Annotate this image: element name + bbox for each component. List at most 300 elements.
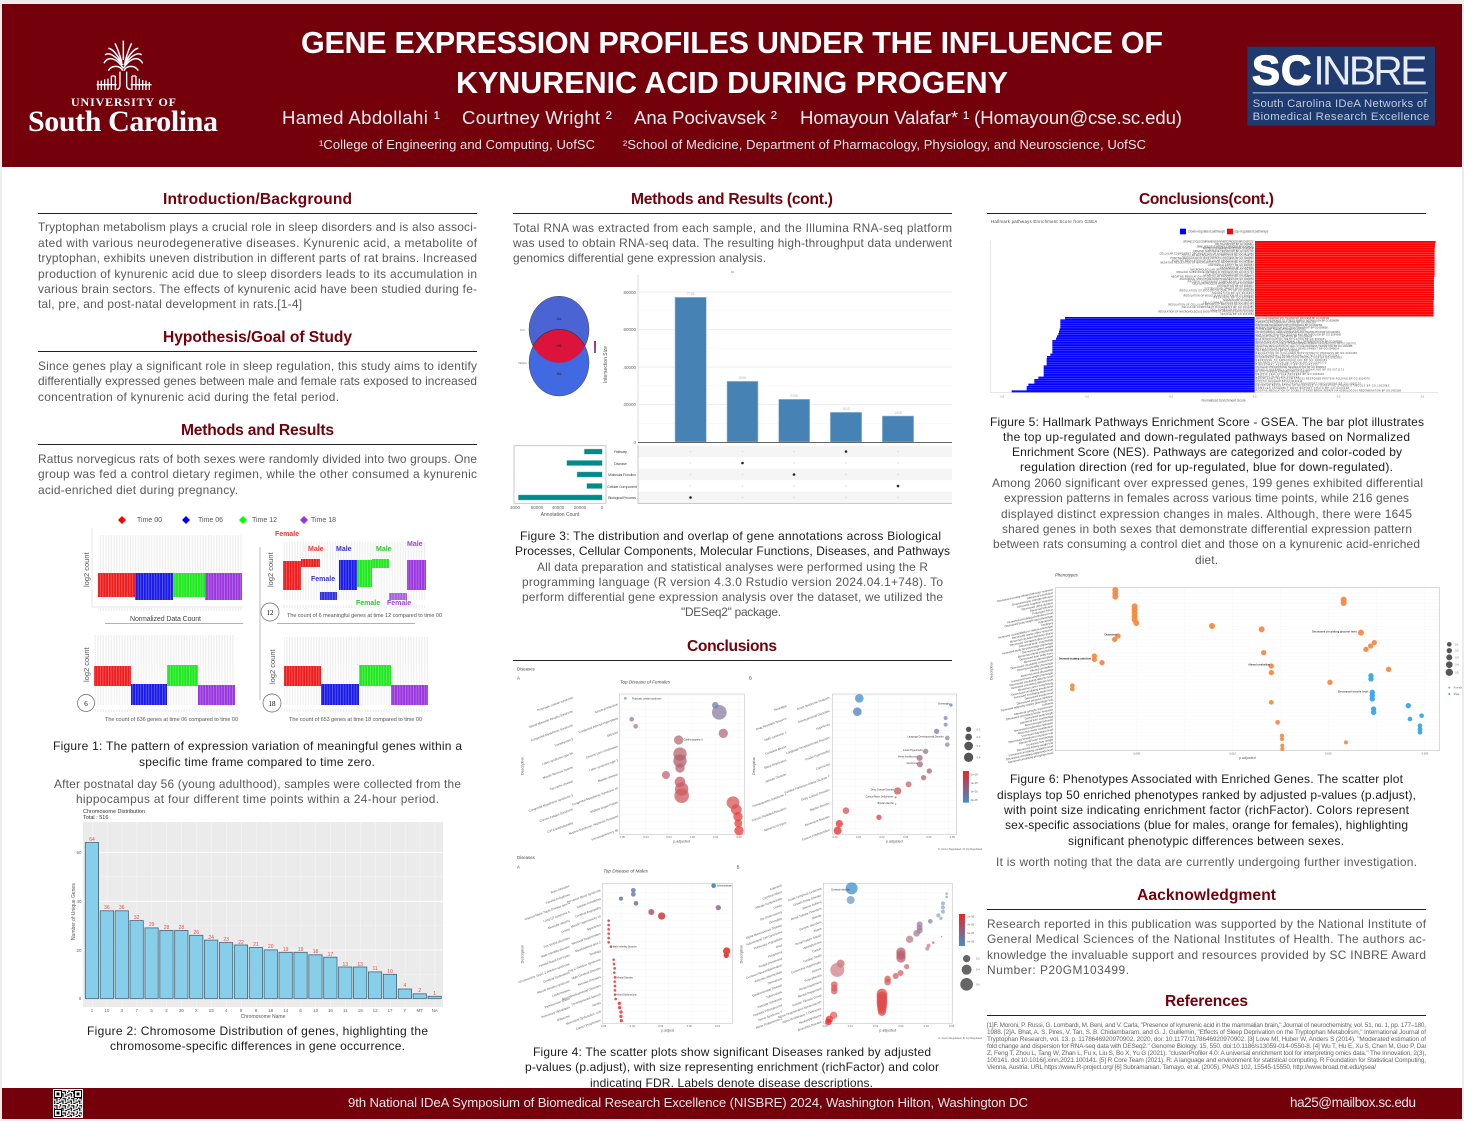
legend: phenotypes: 0.1 <box>1455 642 1459 646</box>
pathway labels: up: CELLULAR PROCESS MODIFICATION BP GO:0009987 <box>1192 283 1254 286</box>
disease labels B: Chronic Radiated Disorders <box>751 806 787 822</box>
pathway labels: up: REGULATION OF MACROMOLECULE BIOSYNTHETIC PROCESS BP GO:0010556 <box>1158 311 1254 314</box>
caption: figure 4: Figure 4: The scatter plots show significant Diseases ranked by adjusted <box>533 1045 931 1059</box>
disease labels male A: Fay C-Deletion Syndrome <box>568 957 602 973</box>
plot: time 12 comparison: Female <box>311 576 335 583</box>
pathway labels: down: MEIOTIC CELL CYCLE PROCESS BP GO:1903046 <box>1256 374 1325 376</box>
plot: time 06 comparison: log2 count <box>82 646 91 682</box>
bar value labels: 2 <box>418 988 421 994</box>
legend: time points: Time 06 <box>198 517 223 524</box>
disease labels male A: Long QT syndrome 6 <box>543 910 571 923</box>
pathway labels: up: CELLULAR COMPONENT BIOGENESIS BP GO:0044085 <box>1182 306 1254 309</box>
disease labels male A: Glaucoma <box>556 1014 571 1022</box>
venn diagram <box>518 296 609 396</box>
scatter: 0.010 <box>1229 752 1236 756</box>
pathway labels: up: SYSTEM DEVELOPMENT BP GO:0048731 <box>1204 288 1254 290</box>
text: introduction body <box>38 220 478 311</box>
scatter male B: 0.05 <box>949 1024 955 1028</box>
disease labels A: Chronic Liver Cholestasis <box>585 744 619 760</box>
legend: male size and colour: 0.2 <box>976 957 980 961</box>
phenotype labels: Abnormal cognition response <box>1017 597 1054 609</box>
pathway labels: down: INTERFERON GAMMA PROTEIN PRODUCTION BP GO:0032609 <box>1256 357 1342 360</box>
disease labels B: Complete Blocks <box>765 744 787 756</box>
authors: Homayoun Valafar* ¹ (Homayoun@cse.sc.edu) <box>800 107 1182 128</box>
scatter B: Overweight <box>938 703 950 706</box>
text: introduction body: various brain sectors. The effects of kynurenic acid have been studied during fe- <box>38 282 477 296</box>
scatter male B: 0.04 <box>924 1024 929 1028</box>
caption: figure 4: indicating FDR. Labels denote disease descriptions. <box>590 1076 873 1090</box>
chart: figure 1 expression patterns <box>78 516 442 723</box>
venn diagram: GO <box>520 328 525 332</box>
chart: figure 4 males diseases <box>517 855 983 1040</box>
pathway labels: down: MITOCHONDRIAL TRANSLATIONAL ACTIVITY BP GO:0032543 <box>1256 354 1340 357</box>
venn diagram: AB <box>557 344 562 348</box>
venn diagram: A& <box>557 317 562 321</box>
text: acknowledgment body: knowledge the invaluable support and resources provided by SC INBRE Award <box>987 948 1426 962</box>
disease labels male A: Unrest <box>561 927 570 934</box>
disease labels A: Muscle Nervous System <box>542 765 574 780</box>
legend: time points: Time 00 <box>137 517 162 524</box>
disease labels male A: Chromosome 15q11.2 deletion syndrome <box>518 962 571 984</box>
axes: 0 <box>79 996 82 1001</box>
disease labels male B: Cardiovascular Disease <box>752 983 783 998</box>
disease labels male A: Brain Infarction <box>550 884 571 894</box>
scatter: Decreased circulating glycerol level <box>1312 631 1357 634</box>
bar value labels: 28 <box>164 925 169 931</box>
disease labels male B: Dermatosis <box>767 976 783 985</box>
phenotype labels: Decreased circulating albumin level <box>1009 674 1054 687</box>
phenotype labels: Decreased lean body mass <box>1019 651 1054 662</box>
legend: size and colour: 0.3 <box>977 744 981 748</box>
authors: Ana Pocivavsek ² <box>634 107 777 128</box>
scatter B: 0.05 <box>950 835 955 839</box>
axes: 5 <box>150 1008 153 1013</box>
phenotype labels: Increased circulating leptin level <box>1013 687 1054 700</box>
disease labels male A <box>518 884 602 1031</box>
disease labels male A: Familial Basal Cell Cysts <box>538 953 571 968</box>
disease labels B: Sleep Deprivation <box>763 758 787 770</box>
phenotype labels: Abnormal synaptic transmission <box>1014 704 1054 716</box>
bar chart: annotation count: Biological Process <box>608 495 636 500</box>
axes: 2 <box>165 1008 168 1013</box>
heading: introduction: Introduction/Background <box>163 191 352 208</box>
disease labels male B: Tuberculosis <box>765 990 783 999</box>
scatter: Altered cerebellum <box>1248 664 1270 667</box>
phenotype labels: Abnormal brain morphology <box>1019 637 1054 649</box>
disease labels male B: Genetic Fibrosis Group <box>792 993 822 1007</box>
disease labels male B: Acute Lymphoid Leukemia <box>788 886 822 902</box>
text: references list: Vienna, Austria. URL https://www.R-project.org/ [6] Subramanian, Tamayo, et al. (2005), PNAS 102, 15545-15550, http://www.broad.mit.edu/gsea/ <box>987 1064 1376 1071</box>
text: references list: Tryptophan Research, vol. 13, p. 1178646920970902, 2020, doi: 10.1177/1178646920970902. [3] Love MI, Huber W, Anders S (2014). "Moderated estimation of <box>987 1036 1426 1043</box>
pathway labels: down: DNA REPLICATION INITIATION BP GO:0006270 <box>1256 361 1327 364</box>
caption: figure 6: significant phenotypic differences between sexes. <box>1068 834 1344 848</box>
text: gene counts: displayed distinct expression changes in males. Although, there were 1645 <box>1001 507 1412 521</box>
axis: 0.5 <box>1337 395 1341 399</box>
disease labels male B: Fungal pneumonia <box>758 956 783 969</box>
disease labels male A: Pulmonary Hypoplasia <box>541 1005 571 1019</box>
disease labels male B: Cancer <box>812 947 822 954</box>
disease labels male A: Neurodevelopmental Disorders <box>561 983 602 1001</box>
pathway labels: down: CHROMATIN BP GO:0006325 <box>1256 375 1300 378</box>
chart: figure 4 females diseases: Description <box>520 757 524 775</box>
legend: male size and colour: 2e-05 <box>967 915 975 919</box>
scatter male B: 0.02 <box>873 1024 879 1028</box>
scatter B: Cortical Motor Deficiencies <box>866 795 894 798</box>
pathway labels: up: NEGATIVE REGULATION OF CELLULAR PROCESS BP GO:0048523 <box>1171 276 1254 279</box>
axes: 20 <box>179 1008 184 1013</box>
bar value labels: 36 <box>119 905 125 911</box>
scatter B: Deep Cortical Disorder <box>871 789 895 792</box>
bar chart: annotation count: 0 <box>601 505 604 510</box>
bar value labels: 4 <box>404 983 407 989</box>
pathway labels: down: CELLULAR RESPIRATION, TRANSPORT PROCESS BP GO:0045333 <box>1256 317 1330 320</box>
scatter A: 0.04 <box>643 835 649 839</box>
pathway labels: up: RESPONSE BP GO:0050896 <box>1214 298 1254 300</box>
axis: -0.5 <box>1168 395 1173 399</box>
axes: Y <box>403 1008 406 1013</box>
phenotype labels: Abnormal motor coordination <box>1017 724 1054 736</box>
bar value labels: 29 <box>149 922 155 928</box>
disease labels B: Seizure Disorder <box>765 772 787 784</box>
phenotype labels: Increased dopamine level <box>1021 727 1054 738</box>
disease labels B <box>751 695 831 842</box>
disease labels male B: Genetic disorders <box>799 920 822 932</box>
legend: male size and colour <box>938 914 983 1040</box>
disease labels male A: Myoclonus <box>587 923 602 931</box>
phenotype labels: Decreased insulin level <box>1024 691 1054 701</box>
chart: figure 4 females diseases: B <box>749 676 752 681</box>
plot: time 12 comparison: 12 <box>266 609 274 617</box>
pathway labels: down <box>1256 317 1402 392</box>
legend: size and colour: 2e-05 <box>971 772 978 776</box>
axes: 60 <box>76 850 82 855</box>
text: RNA-seq methods: genomics differential gene expression analysis. <box>513 251 766 265</box>
text: acknowledgment body: Number: P20GM103499. <box>987 963 1129 977</box>
chart: figure 5 GSEA enrichment: Normalized Enrichment Score <box>1202 399 1246 403</box>
disease labels A: Polycystic ovarian syndrome <box>537 695 574 712</box>
phenotype labels: Decreased kidney weight trait <box>1016 741 1054 752</box>
scatter male B: 0.00 <box>822 1024 828 1028</box>
chart: figure 3 annotation upset plot <box>510 272 952 518</box>
axes: 9 <box>240 1008 243 1013</box>
pathway labels: up: LOCALIZATION PROCESS BP GO:0051179 <box>1204 273 1254 276</box>
axis: 0.0 <box>1253 395 1257 399</box>
scatter male B: 0.01 <box>848 1024 853 1028</box>
authors <box>282 107 1182 128</box>
disease labels male B: Polycythemia <box>804 973 822 983</box>
caption: figure 4: p-values (p.adjust), with size representing enrichment (richFactor) and color <box>525 1060 939 1074</box>
phenotype labels: Asthenia <box>1042 701 1054 707</box>
plot: time 06 comparison <box>78 635 238 723</box>
disease labels male A: Muscle Atrophy syndrome <box>537 979 571 995</box>
phenotype labels: Decreased circulating insulin level <box>1011 684 1054 697</box>
plot: time 06 comparison: 6 <box>84 700 88 708</box>
disease labels A: Transthyretin 3 <box>554 737 574 748</box>
bar value labels <box>89 837 436 997</box>
disease labels male B: Renal Impairment <box>798 980 822 992</box>
venn diagram: B& <box>557 372 562 376</box>
disease labels A: Chronic Fatigue Syndrome <box>539 807 574 823</box>
legend: size and colour: 6e-05 <box>971 790 978 794</box>
logo: SC INBRE: South Carolina IDeA Networks of <box>1253 98 1427 110</box>
axes: 8 <box>255 1008 258 1013</box>
pathway labels: up: POSITIVE REGULATION OF BIOSYNTHETIC PROCESS BP GO:0009891 <box>1170 257 1254 260</box>
disease labels male B: Nerve Degeneration Syndrome AD <box>777 1000 823 1019</box>
legend: male size and colour: 6e-05 <box>967 931 975 935</box>
logo: University of South Carolina <box>28 41 218 138</box>
text: statistical analysis <box>522 560 943 619</box>
pathway labels: up: SECRETION BP GO:0046903 <box>1212 293 1254 295</box>
axes: 16 <box>328 1008 333 1013</box>
panel: introduction <box>38 191 478 311</box>
scatter male A: Mental Disorder <box>617 976 633 979</box>
legend: phenotypes: 0.5 <box>1455 670 1459 674</box>
pathway labels: down: RIBOSOMAL ASSEMBLY BP GO:0042255 <box>1256 364 1318 367</box>
text: sample collection: hippocampus at four different time points within a 24-hour period. <box>76 792 439 806</box>
legend: male size and colour: 0.4 <box>976 968 980 972</box>
disease labels male B: Autoimmune Cell Carcinoma <box>746 930 783 947</box>
authors: Courtney Wright ² <box>462 107 612 128</box>
legend: phenotypes <box>1446 642 1463 696</box>
disease labels male B: Connective Hypertrophy <box>791 960 822 975</box>
scatter: 0.020 <box>1422 752 1429 756</box>
pathway labels: down: MITOCHONDRIAL GENE EXPRESSION AND TRANSLATION BP GO:0140053 <box>1256 331 1340 334</box>
QR code <box>53 1089 83 1118</box>
pathway labels: up: ORGANIC SUBSTANCE TRANSPORT BP GO:0071702 <box>1193 250 1254 253</box>
pathway labels: up: ORGANIC CYCLIC COMPOUND BIOSYNTHETIC PROCESS BP GO:0071702 <box>1183 241 1254 244</box>
text: gene counts: Among 2060 significant over expressed genes, 199 genes exhibited differential <box>992 476 1423 490</box>
pathway labels: down: POSITIVE REGULATION OF DOUBLE STRAND BREAK REPAIR VIA HOMOLOGOUS RECOMBINATION BP GO:1905168 <box>1256 389 1402 392</box>
text: RNA-seq methods: was used to obtain RNA-seq data. The resulting high-throughput data underwent <box>512 236 953 250</box>
pathway labels: down: NUCLEAR CHROMOSOME SEGREGATION BP GO:0098813 <box>1256 366 1326 369</box>
pathway labels: up: ORGANIC SUBSTANCE METABOLIC PROCESS BP GO:0071704 <box>1176 271 1254 274</box>
bar value labels: 17 <box>328 952 333 958</box>
chart: figure 4 males diseases: A <box>517 864 520 869</box>
phenotype labels: Increased body fat percentage phenotype <box>1002 641 1054 655</box>
disease labels male B: Renal Tubular Disorders <box>790 906 822 921</box>
bar chart: annotation count: 3000 <box>510 505 521 510</box>
axes: 14 <box>283 1008 289 1013</box>
chart: figure 4 females diseases: p.adjusted <box>886 840 903 844</box>
disease labels B: Developmental Disorders <box>797 709 831 724</box>
plot: time 06 comparison: The count of 636 genes at time 06 compared to time 00 <box>105 717 238 723</box>
text: RNA-seq methods: Total RNA was extracted from each sample, and the Illumina RNA-seq platform <box>513 221 952 235</box>
phenotype labels: Increased circulating bilirubin level <box>1011 677 1054 690</box>
disease labels A: Tay-sachs disease <box>549 779 574 791</box>
text: hypothesis body: concentration of kynurenic acid during the fetal period. <box>38 390 339 404</box>
bar value labels: 26 <box>194 930 199 936</box>
scatter male A: Male Infertility Disorder <box>613 946 637 949</box>
footer banner <box>2 1088 1462 1119</box>
scatter A: 0.01 <box>713 835 719 839</box>
chart: figure 6 phenotypes: p.adjusted <box>1239 756 1256 760</box>
scatter male A: 0.02 <box>687 1024 692 1028</box>
pathway labels: up: MACROMOLECULAR ORGANIZATION BP GO:0043933 <box>1190 269 1254 272</box>
title: KYNURENIC ACID DURING PROGENY <box>456 66 1008 100</box>
chart: figure 6 phenotypes <box>989 573 1463 764</box>
scatter B: Insulin Hypertrophy <box>903 749 924 752</box>
disease labels A: Nephro-Syndrome, Nephrotic Resistant <box>568 814 619 836</box>
panel: methods and results <box>38 422 477 1053</box>
disease labels B: Hypertonia <box>815 722 831 731</box>
disease labels A: Leber syndrome type 3A <box>542 751 574 766</box>
bar value labels: 23 <box>223 937 229 943</box>
text: further investigation: It is worth noting that the data are currently undergoing further investigation. <box>996 855 1417 869</box>
text: sample collection: After postnatal day 56 (young adulthood), samples were collected from the <box>54 777 461 791</box>
text: introduction body: Tryptophan metabolism plays a crucial role in sleep disorders and is also associ- <box>38 220 477 234</box>
disease labels B: Carcinoma <box>815 762 831 771</box>
scatter male B: Cerebral infarction <box>831 889 851 892</box>
disease labels A: Bladder disease <box>597 772 619 783</box>
legend: size and colour: 0.1 <box>977 727 981 731</box>
authors: Hamed Abdollahi ¹ <box>282 107 440 128</box>
bar chart: annotation count: Cellular Component <box>607 484 638 489</box>
text: references list: [1]F. Moroni, P. Russi, G. Lombardi, M. Beni, and V. Carla, "Presence of kynurenic acid in the mammalian brain," Journal of neurochemistry, vol. 51, no. 1, pp. 177–180, <box>987 1022 1426 1029</box>
text: introduction body: tal, pre, and post-natal development in rats.[1-4] <box>38 297 302 311</box>
disease labels B: Cancer Predisposition <box>801 828 831 842</box>
disease labels male A: Hernia <box>592 1001 602 1008</box>
scatter: Cholestasis <box>1104 634 1117 637</box>
logo: SC INBRE: SC <box>1252 46 1311 93</box>
caption: figure 5: Figure 5: Hallmark Pathways Enrichment Score - GSEA. The bar plot illustrates <box>990 415 1424 429</box>
axes: 10 <box>104 1008 110 1013</box>
bar value labels: 11 <box>372 966 378 972</box>
phenotype labels: Decreased circulating ferritin response <box>1005 707 1054 721</box>
pathway labels: up: LOCOMOTION BP GO:0040011 <box>1217 286 1254 288</box>
phenotype labels <box>997 587 1054 764</box>
disease labels male B: Bronchitis Disease <box>797 1020 822 1032</box>
phenotype labels: Increased adiposity related phenotype trait <box>1001 697 1054 712</box>
plot: time 12 comparison: log2 count <box>266 551 275 587</box>
disease labels B: Bipolar disorder <box>809 801 830 812</box>
scatter male A: 0.03 <box>658 1024 664 1028</box>
phenotype labels: Increased liver weight <box>1026 737 1054 747</box>
axes: 4 <box>225 1008 228 1013</box>
phenotype labels: Decreased spleen weight <box>1022 644 1054 655</box>
disease labels A: CIP Encephalopathy <box>547 821 574 834</box>
pathway labels: down: CELLULAR RESPONSE TO STRESS ENERGY METABOLISM BP GO:0034599 <box>1256 319 1340 322</box>
scatter male A: 0.04 <box>630 1024 635 1028</box>
title <box>301 26 1163 100</box>
scatter: Decreased circulating cortisol level <box>1059 657 1091 660</box>
legend <box>1180 229 1269 234</box>
disease labels male B: Ataxia <box>813 926 822 933</box>
disease labels male B <box>745 883 823 1032</box>
disease labels male A: Cerebral Angiopathy <box>575 905 602 919</box>
phenotype labels: Abnormal cortex morphology <box>1017 681 1054 692</box>
chart: figure 4 males diseases: Top Disease of Males <box>603 869 649 874</box>
disease labels male A: Muscular atrophy <box>547 918 571 930</box>
chart: figure 2 chromosome distribution: Total : 516 <box>83 815 108 821</box>
legend: Down-regulated pathways <box>1188 230 1225 234</box>
bar chart: intersection size: 1610 <box>842 407 850 411</box>
disease labels male B: Arthrosis Intermediate <box>754 970 783 984</box>
axes: MT <box>417 1008 423 1013</box>
scatter A: 0.03 <box>666 835 672 839</box>
pathway labels: up: PROTEOLYSIS IMMUNE PROCESS BP GO:0006508 <box>1203 249 1254 251</box>
text: sample collection <box>54 777 461 806</box>
legend: size and colour: C: Down Regulated, D: Up Regulated <box>938 847 983 851</box>
scatter A: Cardiomyopathy 3 <box>684 739 703 742</box>
phenotype labels: Decreased body length <box>1024 711 1054 721</box>
bar chart: annotation count: 60000 <box>531 505 544 510</box>
chart: figure 4 males diseases: p.adjust <box>661 1029 674 1033</box>
phenotype labels: Prolonged estrus <box>1032 607 1054 616</box>
phenotype labels: Abnormal adrenal gland <box>1023 654 1054 664</box>
legend: size and colour: 0.4 <box>977 755 981 759</box>
scatter B: 0.02 <box>879 835 885 839</box>
scatter male A: Motor Dysfunctions <box>617 994 637 997</box>
phenotype labels: Decreased circulating cortisol level <box>1010 657 1054 670</box>
disease labels A: Multiple Organ Failure <box>590 800 619 814</box>
plot: normalized data count: log2 count <box>82 551 91 587</box>
caption: figure 4 <box>526 1048 939 1088</box>
bars: up-regulated <box>1255 241 1436 317</box>
axis: -1.5 <box>999 395 1004 399</box>
chart: figure 4 males diseases: Diseases <box>517 855 535 860</box>
text: introduction body: ated with various neurodegenerative diseases. Kynurenic acid, a metabolite of <box>38 236 478 250</box>
phenotype labels: Abnormal circulating phosphate level <box>1007 751 1054 764</box>
disease labels male B: Polyphenol <box>767 950 783 959</box>
caption: figure 2: Figure 2: Chromosome Distribution of genes, highlighting the <box>87 1024 428 1038</box>
axes <box>76 850 438 1013</box>
panel: methods and results continued <box>510 191 983 1090</box>
pathway labels: down: NEGATIVE REGULATION OF RESPONSE TO OXIDATIVE STRESS STIMULUS BP GO:1902883 <box>1256 385 1390 388</box>
pathway labels: down: ENDOPLASMIC RETICULUM STRESS RESPONSE PROTEIN FOLDING BP GO:0034976 <box>1256 378 1370 381</box>
caption: figure 6: with point size indicating enrichment factor (richFactor). Colors represent <box>1003 803 1410 817</box>
legend: phenotypes: Female <box>1454 686 1463 690</box>
pathway labels: down: TRANSLATIONAL ELONGATION BP GO:0006414 <box>1256 336 1313 339</box>
text: introduction body: production of kynurenic acid due to sleep disorders leads to its accumulation in <box>38 267 477 281</box>
plot: time 12 comparison: Female <box>387 600 411 607</box>
plot: time 12 comparison: Male <box>308 546 324 553</box>
disease labels male B: Neuroepithelioma <box>799 1013 822 1025</box>
text: references list: Z, Feng T, Zhou L, Tang W, Zhan L, Fu x, Liu S, Bo X, Yu G (2021). "clusterProfiler 4.0: A universal enrichment tool for interpreting omics data." The Innovation, 2(3), <box>987 1050 1426 1057</box>
disease labels male A: Charcot-Marie-Tooth Disease type 4 <box>524 901 571 921</box>
text: references list: 100141. doi:10.1016/j.xinn.2021.100141. [5] R Core Team (2021). R: A language and environment for statistical computing. R Foundation for Statistical Computing, <box>987 1057 1426 1064</box>
disease labels B: Drug Resistant Seizures <box>755 716 787 731</box>
disease labels male B: Hepatitis Fibrosarcoma <box>752 1003 783 1017</box>
legend: male size and colour: 4e-05 <box>967 923 975 927</box>
pathway labels: up: REGULATION OF BIOLOGICAL QUALITY BP GO:0065008 <box>1180 290 1254 293</box>
disease labels male A: Tics Verbal disorders <box>543 936 571 949</box>
plot: time 12 comparison: Male <box>376 546 392 553</box>
disease labels male B: Renal Failure Sepsis <box>795 933 822 946</box>
pathway labels: down: RIBOSOME BIOGENESIS MITOCHONDRIAL BP GO:0042254 <box>1256 324 1323 327</box>
legend: male size and colour: A: Down Regulated, B: Up Regulated <box>938 1036 983 1040</box>
chart: figure 6 phenotypes: Description <box>989 662 993 680</box>
disease labels B: Deep Cortical Disorder <box>801 788 830 802</box>
disease labels male A: Leukomalacia <box>552 988 571 998</box>
text: statistical analysis: programming language (R version 4.3.0 Rstudio version 2024.04.1+748). To <box>522 575 943 589</box>
phenotype labels: Decreased exploration behavior <box>1014 721 1054 733</box>
pathway labels: down: REGULATION OF MITOCHONDRIAL CELL DIFFERENTIATION BP GO:0045595 <box>1256 340 1343 343</box>
bar value labels: 22 <box>238 940 244 946</box>
disease labels male A: Developmental Speech <box>571 992 602 1006</box>
venn diagram: KEGG <box>518 361 527 365</box>
pathway labels: down: NON CODING RNA PROCESSING AND METABOLISM BP GO:0034660 <box>1256 333 1342 336</box>
scatter A: 0.05 <box>620 835 625 839</box>
bar value labels: 19 <box>283 947 289 953</box>
plot: time 18 comparison <box>263 637 428 723</box>
disease labels male B: Severe Asthma <box>802 900 822 911</box>
bar chart: annotation count: Annotation Count <box>541 512 580 518</box>
logo: SC INBRE: Biomedical Research Excellence <box>1253 111 1429 123</box>
caption: figure 5: Enrichment Score (NES). Pathways are categorized and color-coded by <box>1012 445 1402 459</box>
caption: figure 1 <box>53 739 462 769</box>
phenotype labels: Decreased anxiety-related behavior response <box>997 587 1054 603</box>
axes: 12 <box>373 1008 378 1013</box>
